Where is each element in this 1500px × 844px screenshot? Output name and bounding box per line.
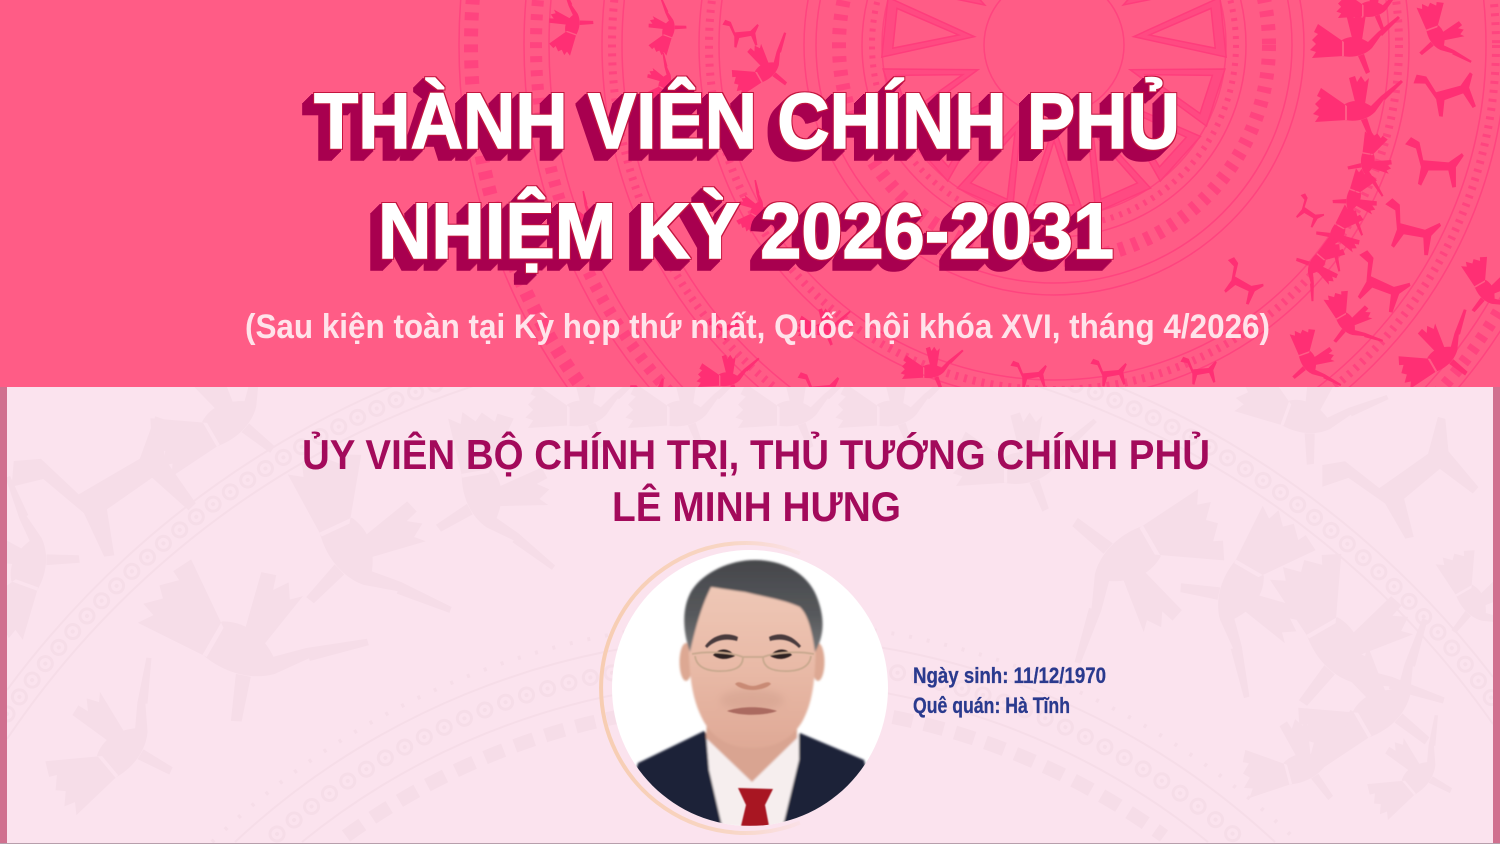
panel: prime minister <box>0 387 1500 844</box>
portrait ring <box>601 543 800 833</box>
ears <box>680 643 692 681</box>
main title <box>314 76 1180 275</box>
section heading: LÊ MINH HƯNG <box>612 482 901 530</box>
subtitle: (Sau kiện toàn tại Kỳ họp thứ nhất, Quốc hội khóa XVI, tháng 4/2026) <box>245 308 1270 346</box>
neck <box>704 726 798 782</box>
bronze drum pattern: panel <box>0 313 1500 842</box>
eyes <box>713 649 735 659</box>
biography: Quê quán: Hà Tĩnh <box>913 693 1070 718</box>
panel bottom edge <box>0 843 1500 844</box>
panel background <box>7 387 1493 843</box>
bronze drum pattern: header <box>458 0 1500 387</box>
chin shadow <box>726 692 778 706</box>
section heading: ỦY VIÊN BỘ CHÍNH TRỊ, THỦ TƯỚNG CHÍNH PHỦ <box>302 430 1210 478</box>
portrait <box>601 543 888 833</box>
shirt <box>706 733 799 826</box>
mouth <box>727 707 777 715</box>
hair <box>684 560 823 652</box>
tie <box>738 788 773 826</box>
panel side strips <box>0 387 1500 843</box>
portrait disc <box>612 550 888 826</box>
suit <box>636 730 866 824</box>
portrait figure <box>636 558 866 826</box>
eyebrows <box>705 634 738 648</box>
main title: THÀNH VIÊN CHÍNH PHỦ <box>314 76 1180 165</box>
header background <box>0 0 1500 387</box>
glasses <box>692 652 814 671</box>
section heading <box>302 430 1210 530</box>
face <box>688 586 816 732</box>
biography <box>913 663 1106 718</box>
nose <box>735 682 771 690</box>
main title: NHIỆM KỲ 2026-2031 <box>378 186 1114 275</box>
biography: Ngày sinh: 11/12/1970 <box>913 663 1106 688</box>
